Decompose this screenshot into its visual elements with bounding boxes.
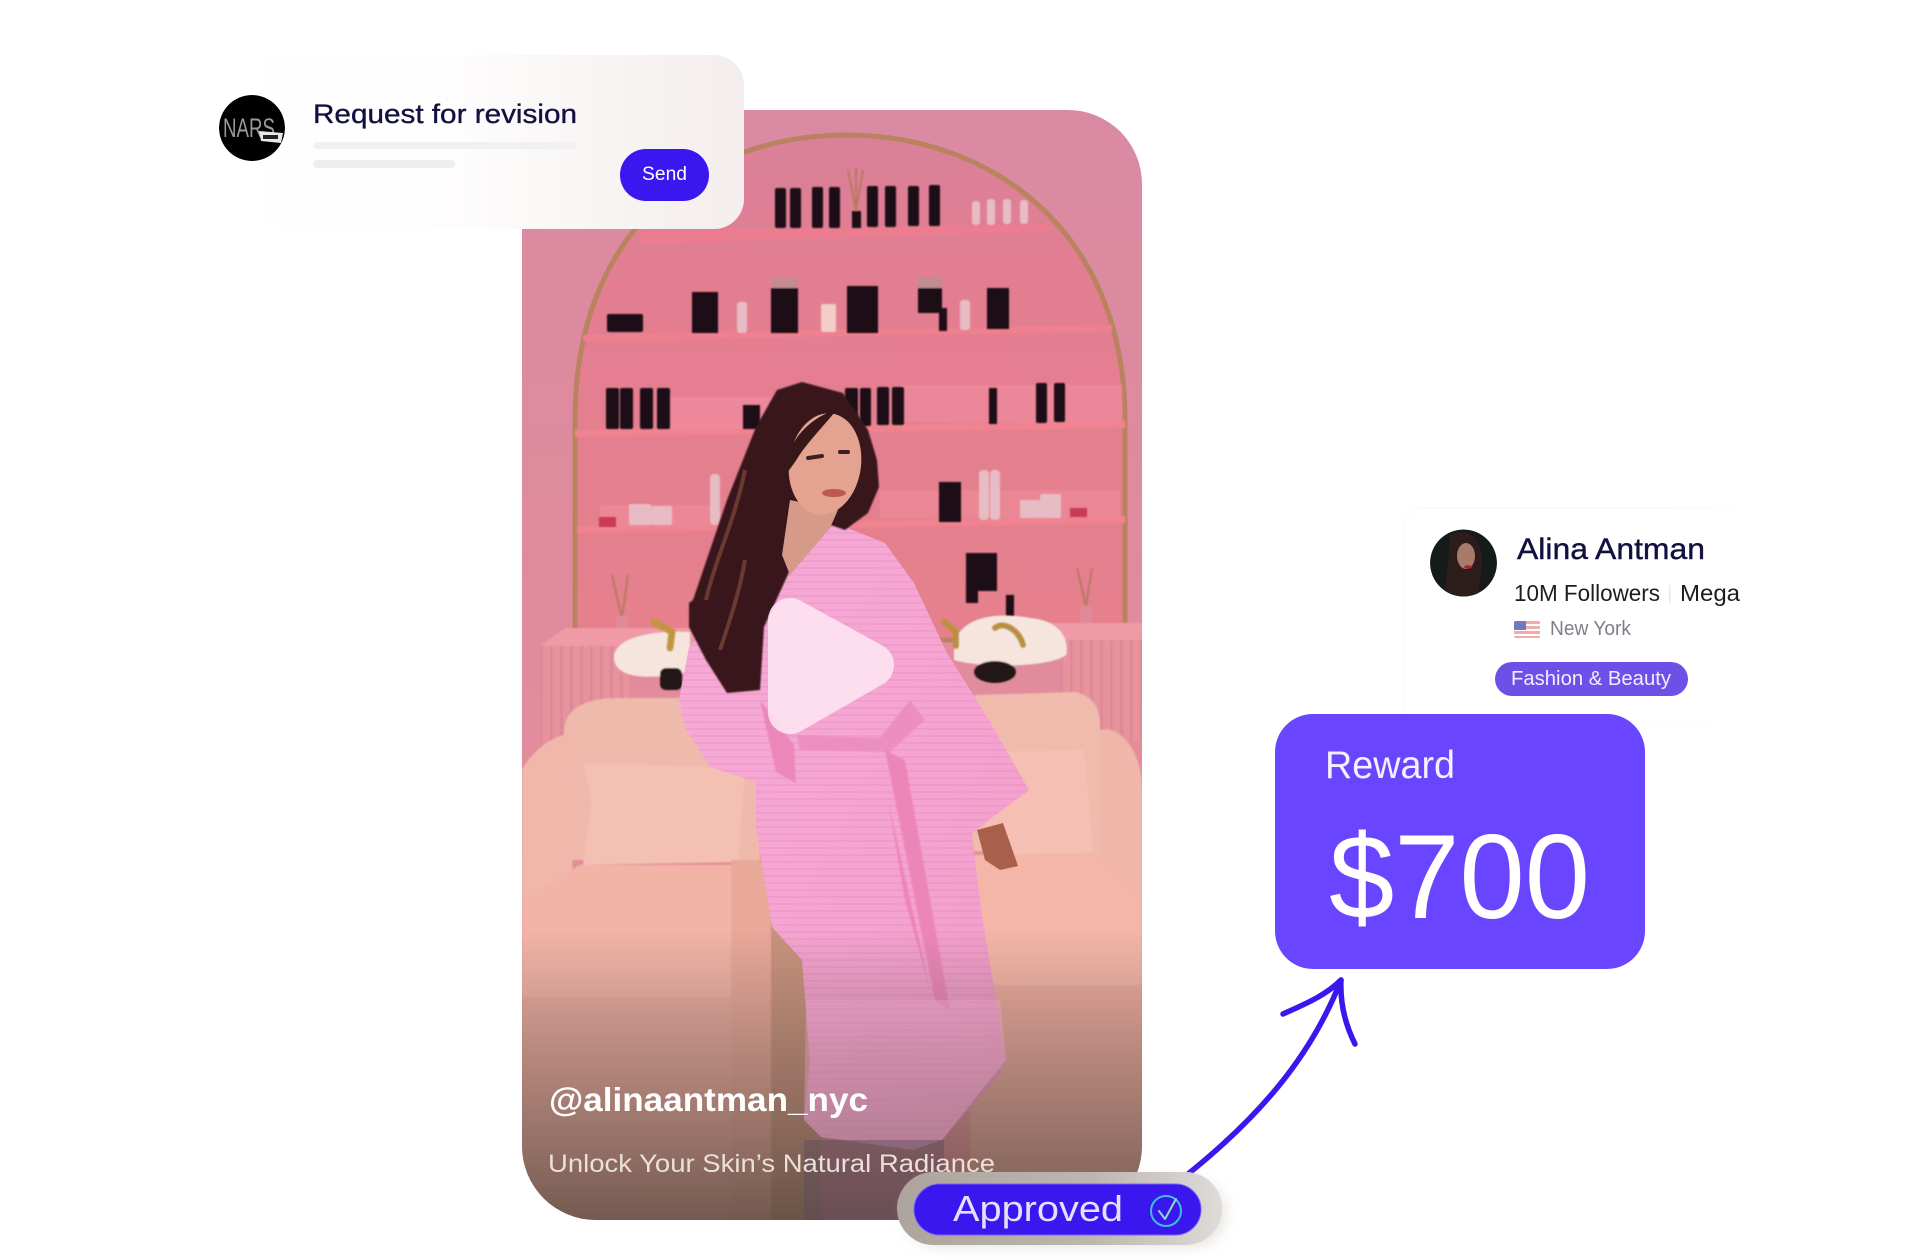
bottom fade overlay	[522, 930, 1142, 1220]
approved badge	[897, 1172, 1225, 1246]
icon: US flag	[1514, 621, 1540, 638]
face	[788, 413, 862, 514]
robe belt and folds	[760, 700, 950, 1010]
send button: Send	[642, 164, 687, 185]
badge shadow	[905, 1180, 1225, 1246]
reward background	[1275, 714, 1645, 969]
brand logo: NARS	[223, 113, 275, 143]
badge outer ring	[897, 1172, 1222, 1245]
hair	[689, 382, 879, 693]
icon: check circle	[1151, 1196, 1181, 1226]
badge inner pill	[914, 1184, 1201, 1235]
neck	[782, 500, 838, 575]
location: New York	[1550, 618, 1632, 640]
products on shelves	[599, 168, 1092, 634]
avatar	[1430, 530, 1497, 597]
panel: reward	[1275, 714, 1645, 969]
arrow to reward	[1188, 980, 1355, 1174]
category pill: Fashion & Beauty	[1511, 668, 1671, 690]
reward amount: $700	[1329, 810, 1590, 944]
brand logo	[219, 95, 285, 161]
robe	[679, 523, 1029, 1150]
panel: product video photo	[522, 110, 1142, 1237]
arched gold shelf frame	[575, 135, 1125, 640]
followers and tier: Mega	[1680, 580, 1740, 606]
right salon chair	[970, 692, 1142, 1172]
play button	[790, 620, 872, 712]
panel: influencer profile	[1430, 530, 1740, 696]
placeholder lines	[313, 142, 577, 168]
panel: request for revision	[190, 55, 744, 229]
video caption: Unlock Your Skin’s Natural Radiance	[548, 1150, 995, 1178]
salon cabinets	[542, 622, 1142, 646]
revision title: Request for revision	[313, 99, 577, 129]
woman in pink robe	[679, 382, 1029, 1150]
hand	[977, 823, 1018, 870]
card background	[190, 55, 744, 229]
creator handle: @alinaantman_nyc	[549, 1081, 868, 1118]
shelves	[575, 224, 1125, 533]
profile card background	[1403, 507, 1779, 725]
influencer name: Alina Antman	[1517, 533, 1705, 566]
followers and tier	[1514, 580, 1740, 606]
washbasins and gold taps	[614, 615, 1067, 690]
send button	[620, 149, 709, 201]
left salon chair	[522, 698, 821, 1237]
salon wall	[522, 110, 1142, 1220]
reward label: Reward	[1325, 744, 1455, 787]
badge text: Approved	[953, 1188, 1123, 1229]
followers and tier: 10M Followers	[1514, 580, 1660, 606]
category pill	[1495, 662, 1688, 696]
